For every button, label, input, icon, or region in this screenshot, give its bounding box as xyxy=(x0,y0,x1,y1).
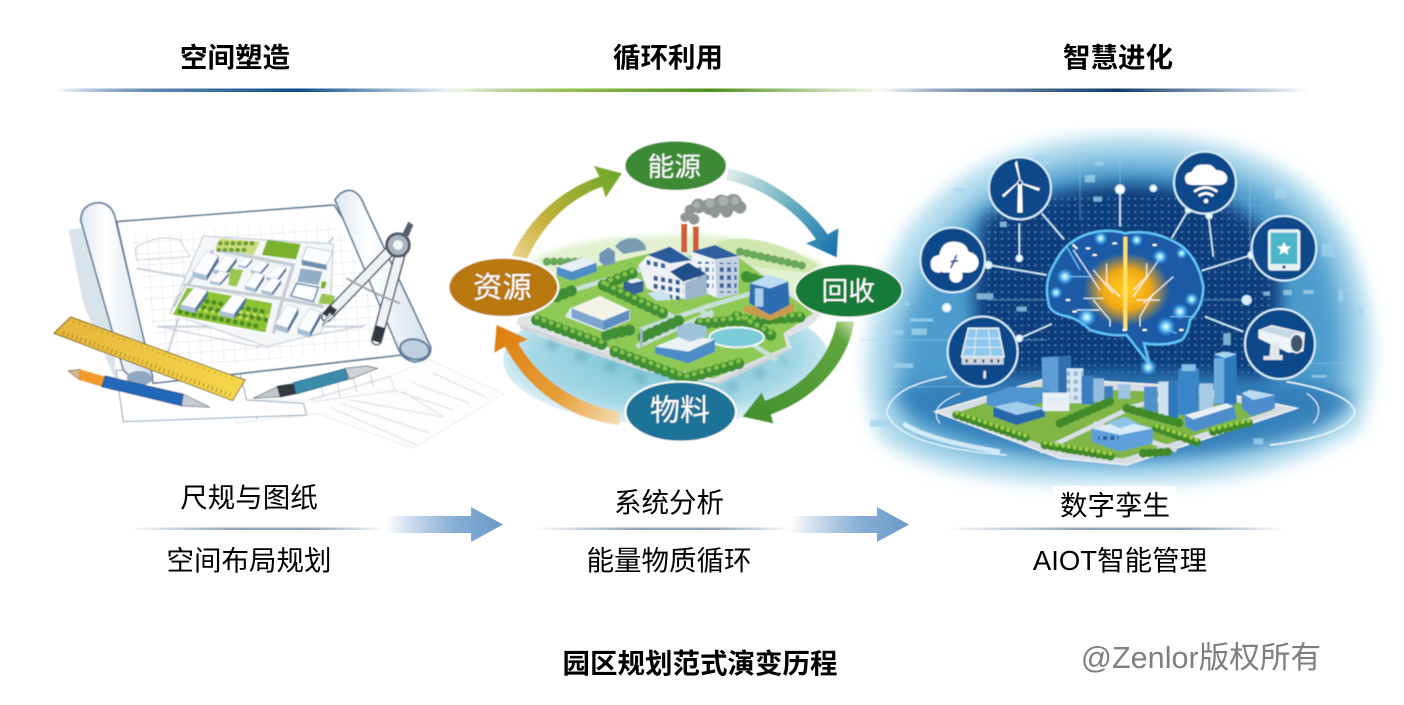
island platform xyxy=(516,253,823,383)
arrow: materials to resource xyxy=(494,325,619,425)
node: 物料 xyxy=(625,382,736,442)
illustration: blueprint with ruler, pens and compass xyxy=(54,191,504,448)
arrow: recycling to materials xyxy=(743,322,854,423)
arrow: second stage to third stage xyxy=(790,507,909,542)
label: 数字孪生: 数字孪生 xyxy=(1060,490,1170,521)
heading: 智慧进化: 智慧进化 xyxy=(1063,42,1173,73)
icon: wind turbine xyxy=(989,157,1051,219)
compass xyxy=(322,222,413,342)
city towers xyxy=(1042,352,1237,418)
label: 尺规与图纸: 尺规与图纸 xyxy=(180,482,318,513)
node: 回收: 回收 xyxy=(822,277,875,307)
brain xyxy=(1047,231,1203,376)
heading: 循环利用: 循环利用 xyxy=(613,42,723,73)
planned site: blocks and green areas xyxy=(170,236,335,347)
blueprint shadow xyxy=(68,227,150,383)
node: 能源 xyxy=(625,141,727,191)
node: 资源 xyxy=(448,258,558,317)
watermark: @Zenlor版权所有 xyxy=(1081,641,1321,675)
water base xyxy=(503,295,830,425)
smart city on island xyxy=(935,352,1297,465)
green trees xyxy=(957,400,1253,457)
node: 能源: 能源 xyxy=(648,152,701,182)
illustration: digital brain and smart city xyxy=(860,135,1373,484)
water treatment facility xyxy=(640,323,764,363)
smokestacks and smoke xyxy=(680,194,746,252)
icon: solar panel xyxy=(948,317,1018,387)
label: 空间布局规划: 空间布局规划 xyxy=(166,545,332,576)
left paper roll xyxy=(81,203,153,386)
node: 资源: 资源 xyxy=(473,272,532,305)
green park top xyxy=(215,238,260,255)
connector lines xyxy=(943,185,1255,341)
lower loose sheet xyxy=(237,360,504,448)
node: 物料: 物料 xyxy=(650,395,710,428)
ruler xyxy=(54,317,245,401)
blue tower xyxy=(744,275,794,321)
icon: tablet xyxy=(1252,216,1316,281)
label: AIOT智能管理: AIOT智能管理 xyxy=(1033,545,1207,576)
white label backing xyxy=(1053,486,1176,522)
node: 回收 xyxy=(795,264,902,317)
distant hills xyxy=(523,235,823,317)
low-rise buildings xyxy=(987,387,1275,452)
illustration: park resource cycle xyxy=(448,141,902,442)
arrow: energy to recycling xyxy=(727,168,838,257)
orbit rings xyxy=(887,377,1355,455)
icon: surveillance camera xyxy=(1245,309,1315,379)
label: 系统分析: 系统分析 xyxy=(614,487,724,518)
icon: cloud with node xyxy=(920,228,985,292)
arrow: first stage to second stage xyxy=(385,507,503,542)
teal pen xyxy=(253,366,377,398)
hedges and trees xyxy=(537,272,807,378)
label: 能量物质循环: 能量物质循环 xyxy=(586,545,752,576)
blueprint sheet xyxy=(115,205,430,422)
glowing blue backdrop xyxy=(866,135,1373,484)
heading: 空间塑造: 空间塑造 xyxy=(180,42,290,73)
blue pencil xyxy=(68,369,210,407)
warehouses xyxy=(557,238,646,332)
main plant building xyxy=(623,245,739,301)
data tiles xyxy=(870,148,1363,444)
reflections in water xyxy=(547,343,787,390)
caption: 园区规划范式演变历程 xyxy=(562,648,838,679)
right paper roll xyxy=(335,191,431,362)
circuit grid lines xyxy=(860,143,1360,387)
icon: cloud and wifi xyxy=(1174,152,1236,214)
arrow: resource to energy xyxy=(512,166,622,258)
